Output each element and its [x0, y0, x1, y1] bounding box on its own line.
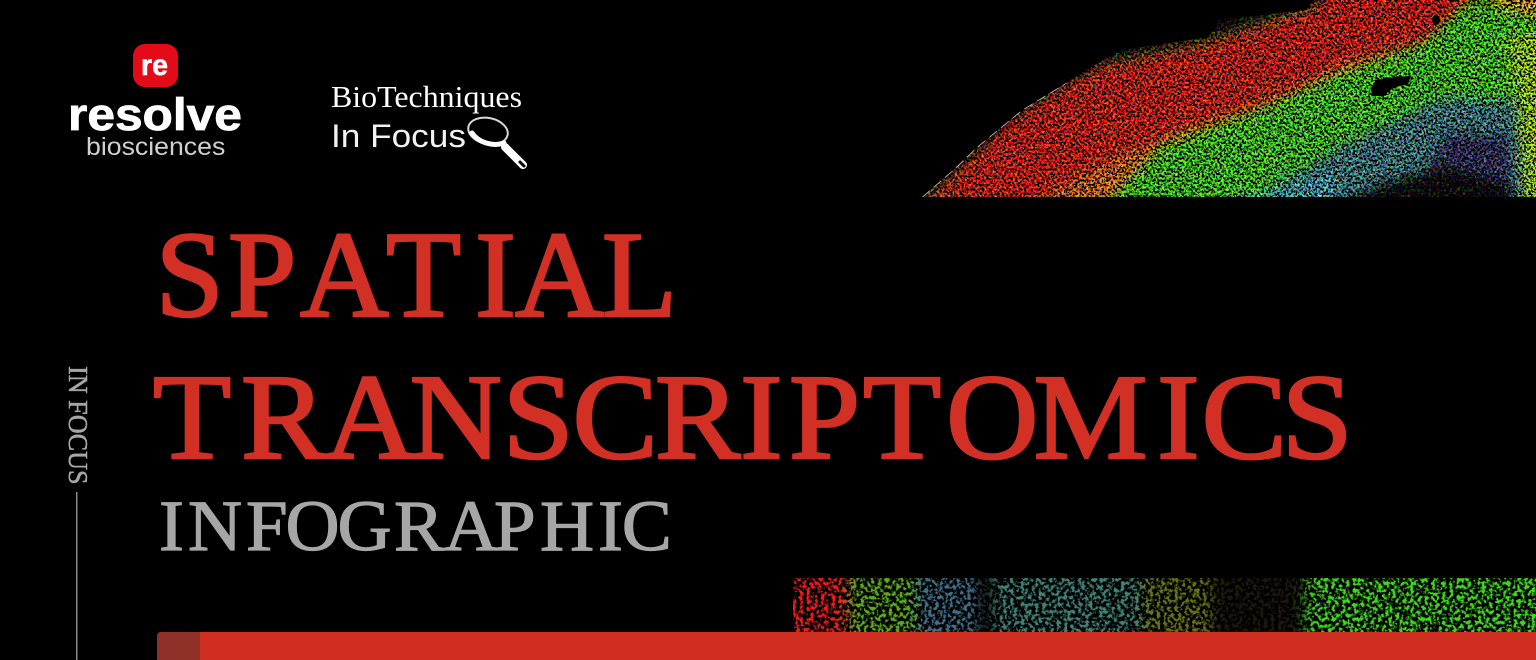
side label: IN FOCUS: IN FOCUS: [63, 366, 93, 485]
red banner bar: [157, 632, 1536, 660]
logo: resolve biosciences: [68, 44, 242, 161]
title: TRANSCRIPTOMICS: TRANSCRIPTOMICS: [153, 351, 1353, 485]
icon: red rounded square with re: re: [141, 49, 168, 82]
wordmark: BioTechniques: BioTechniques: [331, 79, 522, 114]
wordmark: In Focus: In Focus: [331, 119, 466, 155]
hole in tissue: [1371, 76, 1411, 96]
tissue edge highlight: [922, 83, 1066, 197]
image: spatial transcriptomics tissue map, top right: [922, 0, 1536, 197]
title: SPATIAL: SPATIAL: [156, 206, 677, 343]
logo: BioTechniques In Focus: [331, 79, 524, 166]
wordmark: resolve: resolve: [68, 90, 242, 140]
icon: magnifying glass: [466, 114, 524, 166]
subtitle: INFOGRAPHIC: INFOGRAPHIC: [159, 486, 672, 566]
image: spatial transcriptomics tissue map, lower strip: [793, 578, 1536, 632]
side rule: [76, 492, 78, 660]
icon: red rounded square with re: [133, 44, 178, 87]
wordmark: biosciences: biosciences: [86, 134, 225, 161]
